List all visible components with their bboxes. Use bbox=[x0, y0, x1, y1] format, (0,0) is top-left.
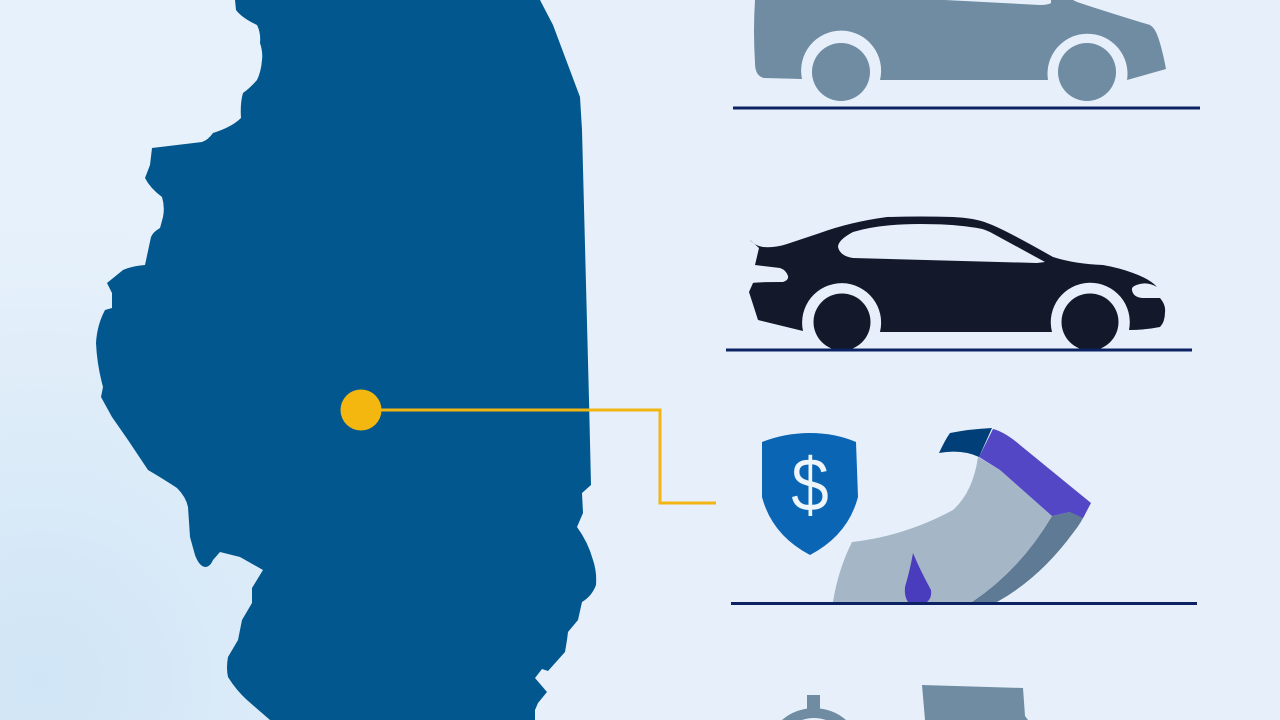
icon: insurance shield with dollar sign bbox=[762, 433, 858, 555]
map: Illinois state silhouette bbox=[96, 0, 596, 720]
ground line: black car bbox=[726, 348, 1192, 352]
icon: black sports car bbox=[749, 216, 1165, 350]
ground line: grey car bbox=[733, 106, 1200, 110]
fender purple band bbox=[979, 429, 1091, 518]
marker: yellow location dot bbox=[340, 390, 382, 430]
connector: yellow leader line bbox=[370, 410, 716, 503]
fender side bbox=[972, 508, 1088, 602]
icon: grey car bbox=[754, 0, 1166, 101]
icon: bent fender with oil drop bbox=[833, 428, 1091, 602]
icon: partial coin at bottom edge bbox=[782, 695, 846, 720]
oil drop bbox=[905, 553, 931, 602]
icon: partial grey block at bottom edge bbox=[922, 685, 1028, 720]
ground line: fender bbox=[731, 602, 1197, 605]
fender navy tip bbox=[939, 428, 992, 457]
dollar sign: $ bbox=[791, 444, 829, 528]
fender face bbox=[833, 457, 1052, 602]
